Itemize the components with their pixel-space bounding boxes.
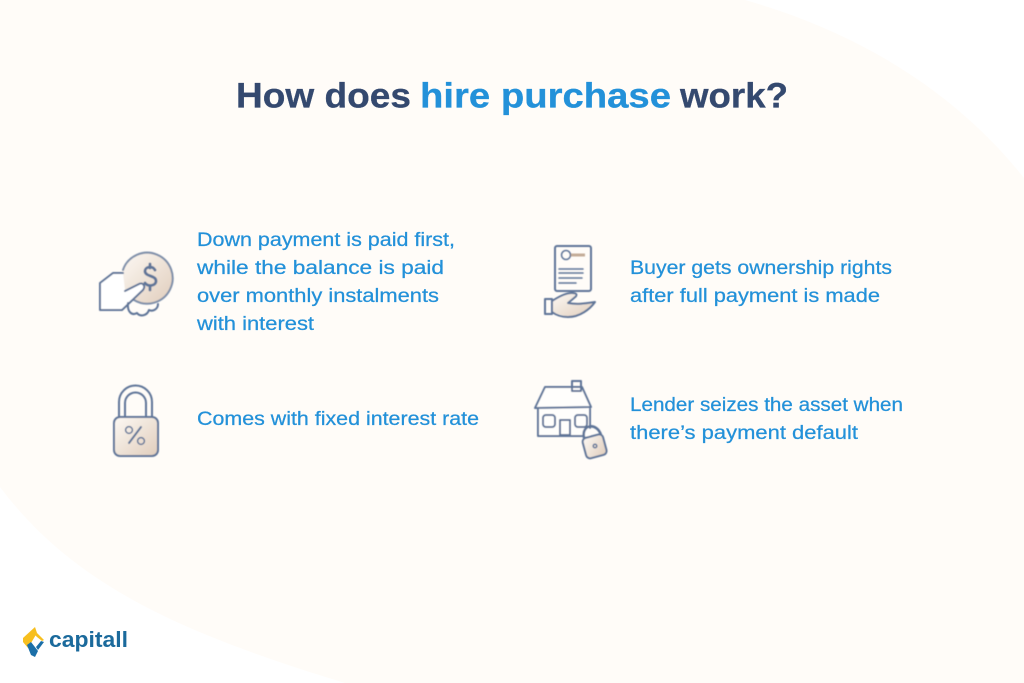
icon: hand holding dollar coin: [100, 252, 173, 315]
panel: ownership rights: [545, 246, 892, 317]
icon: logo mark: [23, 627, 44, 657]
panel: fixed interest: [114, 386, 479, 456]
text: ownership rights: Buyer gets ownership rights: [630, 257, 892, 279]
text: down payment: over monthly instalments: [197, 285, 439, 307]
text: ownership rights: [630, 257, 892, 307]
text: asset seizure: there’s payment default: [630, 422, 859, 444]
panel: asset seizure: [535, 381, 903, 459]
text: fixed interest: Comes with fixed interest rate: [197, 408, 479, 430]
title: work?: [679, 76, 788, 116]
text: down payment: [196, 229, 455, 335]
text: down payment: with interest: [196, 313, 315, 335]
icon: document with key over hand: [545, 246, 595, 317]
logo wordmark: capitall: [49, 627, 128, 652]
text: down payment: while the balance is paid: [196, 257, 444, 279]
title: How does: [236, 76, 411, 116]
text: ownership rights: after full payment is made: [630, 285, 880, 307]
icon: house with padlock: [535, 381, 607, 459]
title: hire purchase: [420, 76, 671, 116]
text: down payment: Down payment is paid first,: [197, 229, 455, 251]
panel: down payment: [100, 229, 455, 335]
title: [236, 76, 788, 116]
text: asset seizure: Lender seizes the asset when: [630, 394, 903, 416]
logo: capitall: [23, 627, 128, 657]
text: asset seizure: [630, 394, 903, 444]
icon: padlock with percent sign: [114, 386, 158, 456]
